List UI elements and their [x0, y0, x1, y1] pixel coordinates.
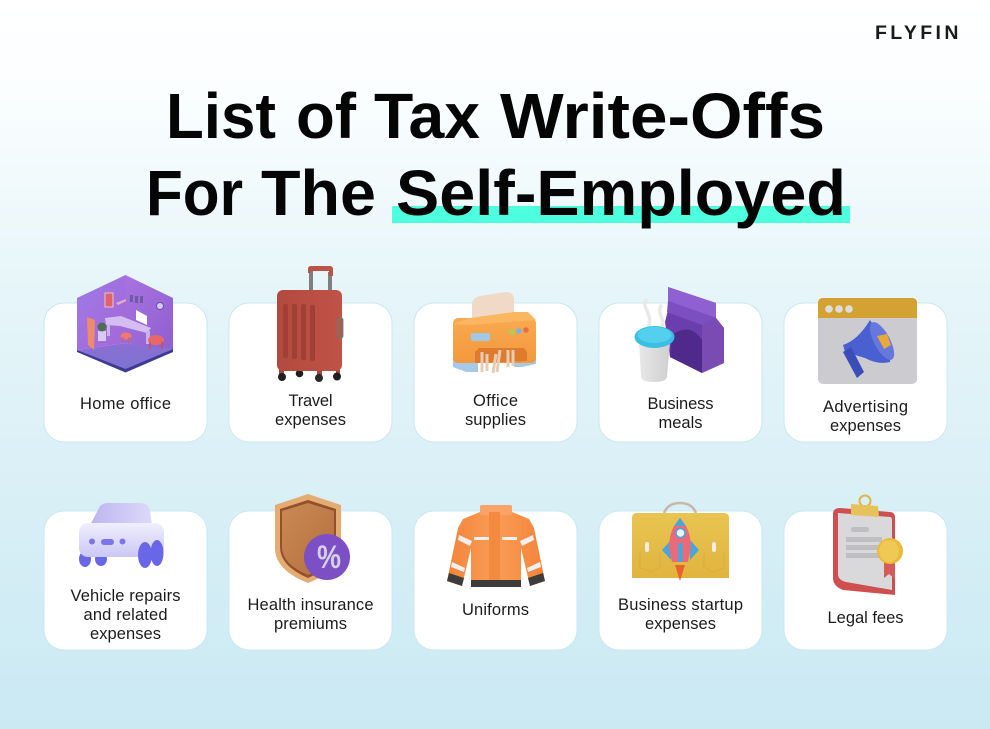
card: Office supplies [414, 292, 577, 442]
card: Office supplies: supplies [465, 411, 526, 429]
label: Advertising [823, 398, 908, 416]
icon: shield with percent badge: % [317, 539, 341, 575]
card: Legal fees [784, 496, 947, 650]
label: Home office [80, 395, 171, 413]
card: Advertising expenses: expenses [830, 417, 901, 435]
title: of [296, 80, 357, 152]
icon: coffee cup and lunch bag [634, 287, 724, 382]
card: Travel expenses: expenses [275, 411, 346, 429]
card: Vehicle repairs: and related [84, 606, 168, 624]
card: Business startup: expenses [645, 615, 716, 633]
title: Self-Employed [396, 157, 846, 229]
card: Health insurance: premiums [274, 615, 347, 633]
label: Travel [288, 392, 332, 410]
label: Health insurance [248, 596, 374, 614]
card: Business meals [599, 287, 762, 442]
icon: orange jacket [447, 505, 545, 587]
icon: red suitcase [277, 266, 342, 382]
title [146, 80, 846, 229]
icon: shield with percent badge [275, 494, 350, 583]
title: List [166, 80, 276, 152]
title highlight [392, 206, 850, 223]
card: Uniforms [414, 505, 577, 650]
card: Business meals: meals [658, 414, 702, 432]
icon: lavender car [79, 503, 164, 568]
card: Travel expenses [229, 266, 392, 442]
logo: FLYFIN: FLYFIN [875, 22, 962, 44]
icon: clipboard with seal [833, 496, 903, 595]
title: Tax [374, 80, 480, 152]
title: The [261, 157, 376, 229]
card: Vehicle repairs [44, 503, 207, 650]
label: Legal fees [828, 609, 904, 627]
icon: isometric home office room [77, 275, 173, 372]
label: Uniforms [462, 601, 529, 619]
title: Write-Offs [500, 80, 825, 152]
icon: paper shredder [453, 292, 536, 373]
label: Office [473, 392, 518, 410]
icon: browser window with megaphone [818, 298, 917, 384]
card: Vehicle repairs: expenses [90, 625, 161, 643]
card: Advertising expenses [784, 298, 947, 442]
card: Business startup [599, 503, 762, 650]
label: Vehicle repairs [70, 587, 180, 605]
label: Business [648, 395, 714, 413]
card: Health insurance [229, 494, 392, 650]
title: For [146, 157, 243, 229]
icon: briefcase with rocket [632, 503, 729, 581]
label: Business startup [618, 596, 743, 614]
card: Home office [44, 275, 207, 442]
